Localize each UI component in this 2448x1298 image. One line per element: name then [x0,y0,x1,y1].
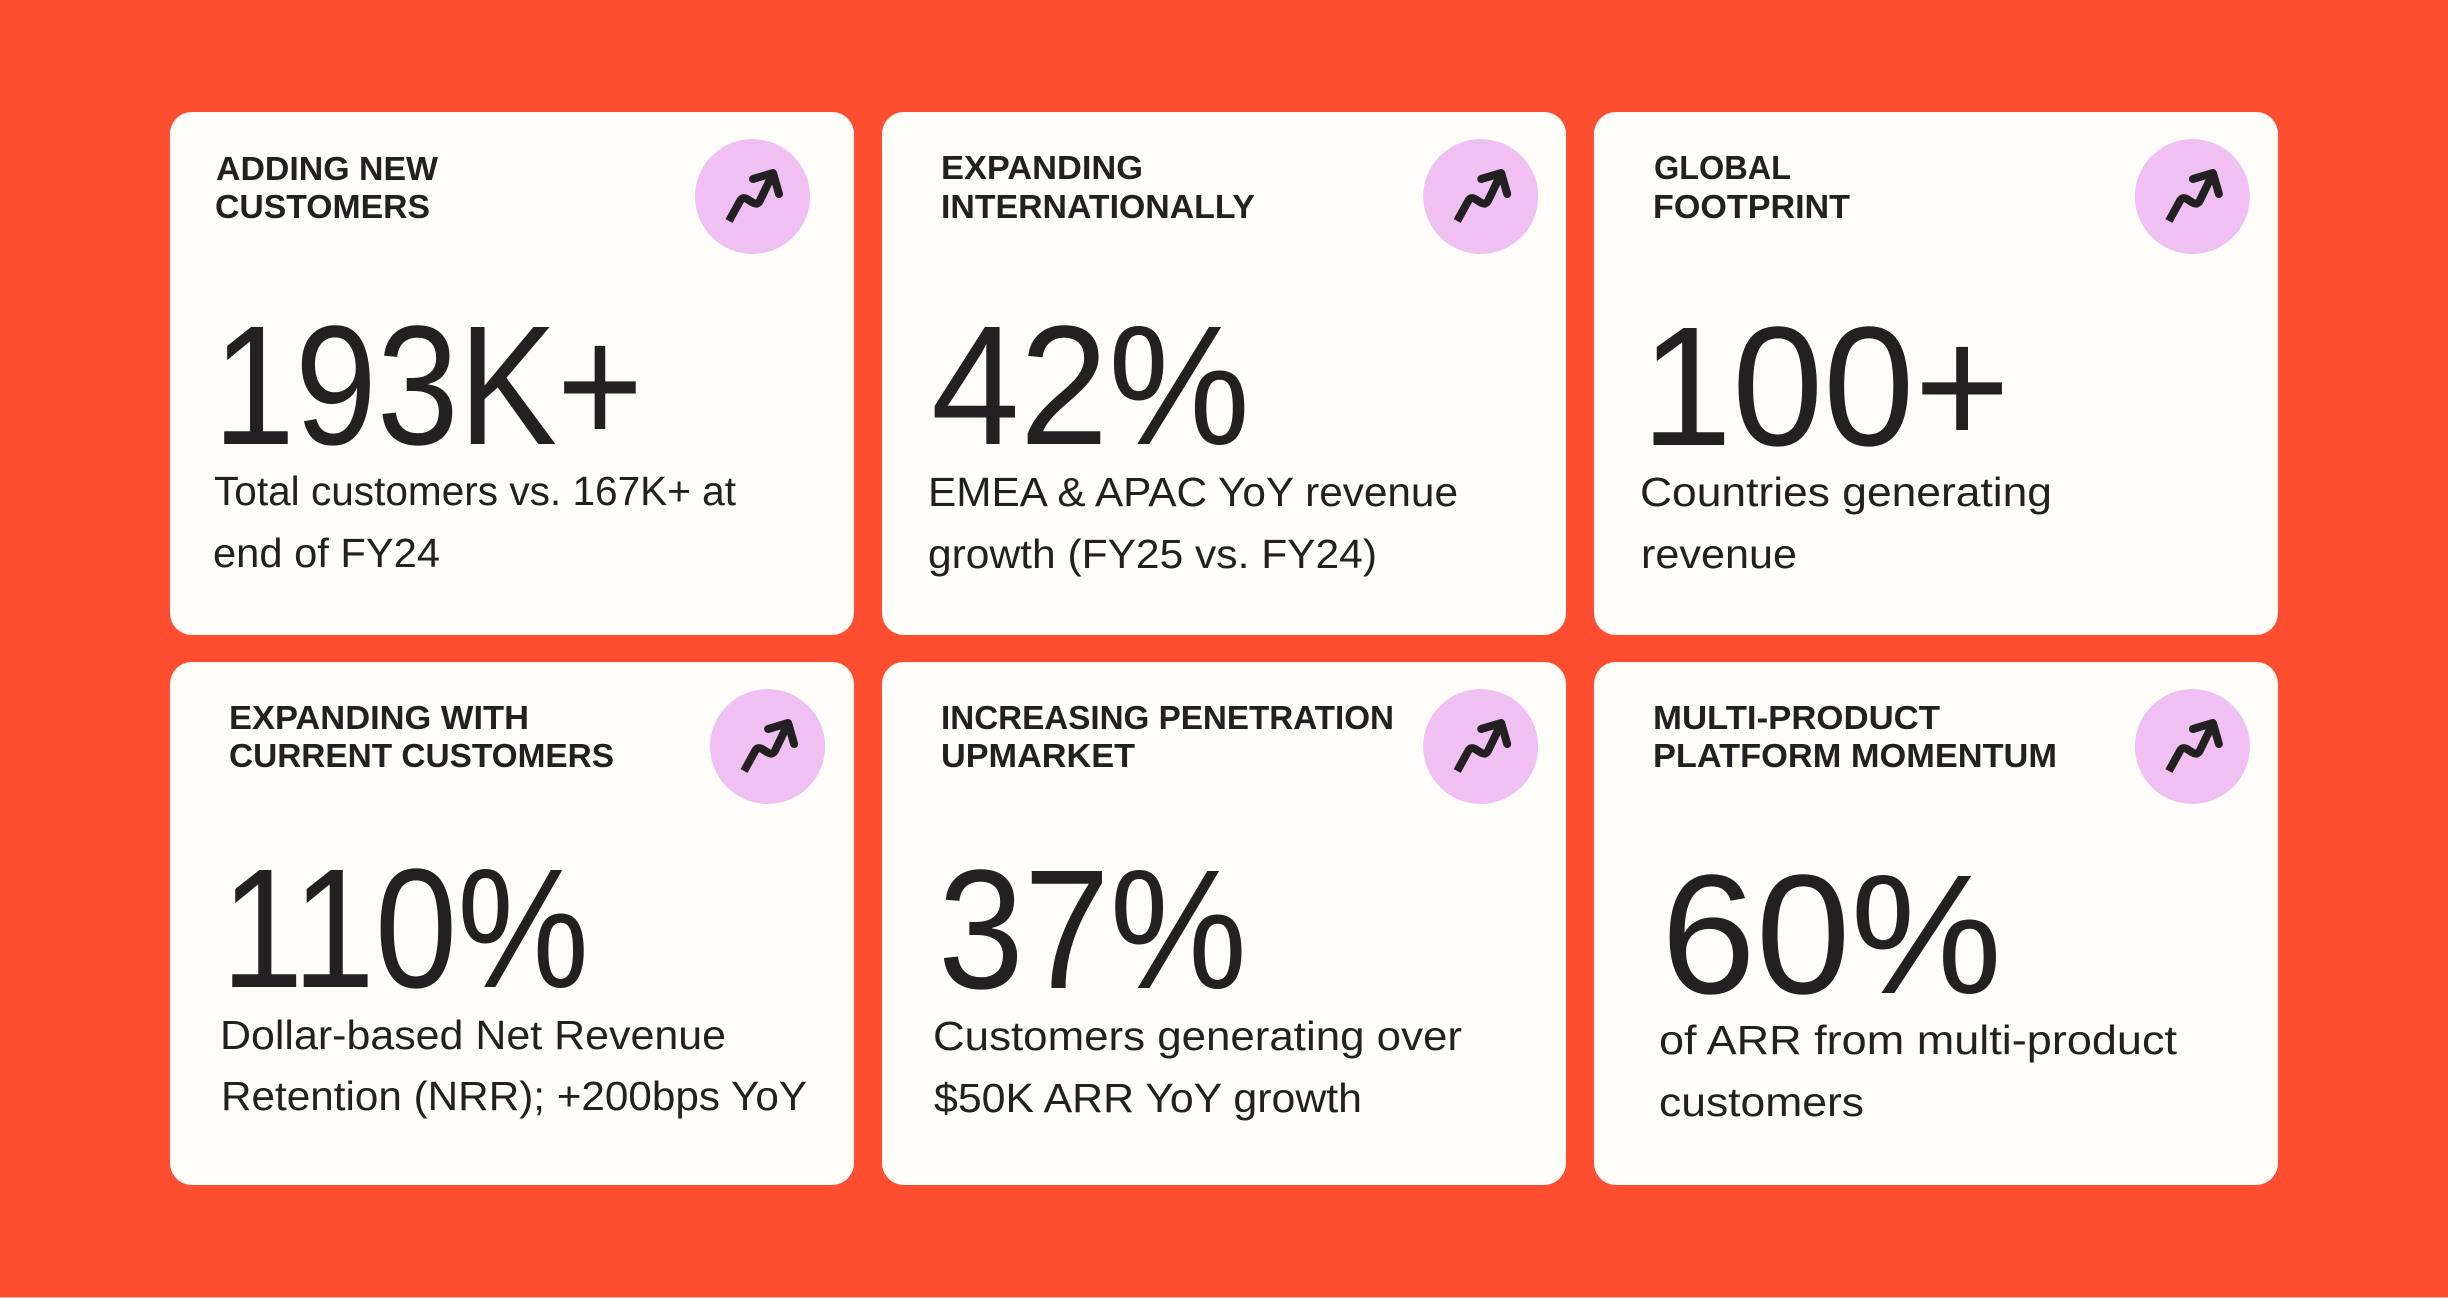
big number: 100+: 100+ [1641,292,2010,482]
icon: trend arrow [1423,139,1538,254]
icon: trend arrow [695,139,810,254]
heading: expanding internationally [941,149,1255,225]
heading: expanding with current customers: EXPANDING WITH [229,699,529,736]
heading: adding new customers [215,150,439,225]
big number: 37%: 37% [938,835,1247,1025]
heading: adding new customers: ADDING NEW [216,150,439,187]
heading: multi-product platform momentum [1653,699,2057,774]
icon: trend arrow [710,689,825,804]
heading: expanding internationally: EXPANDING [941,149,1143,186]
big number: 60%: 60% [1661,840,2002,1030]
heading: expanding internationally: INTERNATIONALLY [941,188,1255,225]
description: EMEA and APAC growth [928,469,1458,577]
heading: global footprint: FOOTPRINT [1653,188,1850,225]
description: countries generating revenue: revenue [1641,531,1797,577]
description: EMEA and APAC growth: growth (FY25 vs. FY24) [928,531,1377,577]
description: net revenue retention [220,1012,807,1119]
big number: 193K+: 193K+ [213,291,643,481]
panel: expanding with current customers [170,662,854,1185]
big number: 110%: 110% [221,834,589,1024]
description: EMEA and APAC growth: EMEA & APAC YoY revenue [928,469,1458,515]
description: net revenue retention: Dollar-based Net Revenue [220,1012,726,1058]
description: ARR from multi-product customers: of ARR from multi-product [1659,1017,2178,1063]
description: net revenue retention: Retention (NRR); +200bps YoY [221,1073,807,1119]
panel: expanding internationally [882,112,1566,635]
heading: increasing penetration upmarket [941,699,1394,774]
panel: adding new customers [170,112,854,635]
heading: global footprint: GLOBAL [1654,149,1791,186]
heading: multi-product platform momentum: MULTI-PRODUCT [1653,699,1940,736]
panel: multi-product platform momentum [1594,662,2278,1185]
description: ARR from multi-product customers: customers [1659,1079,1864,1125]
icon: trend arrow [2135,689,2250,804]
description: countries generating revenue [1640,469,2052,577]
heading: increasing penetration upmarket: UPMARKET [941,737,1135,774]
description: total customers [213,468,737,576]
description: countries generating revenue: Countries generating [1640,469,2052,515]
icon: trend arrow [2135,139,2250,254]
heading: increasing penetration upmarket: INCREASING PENETRATION [941,699,1394,736]
big number: 42%: 42% [931,291,1250,481]
heading: adding new customers: CUSTOMERS [215,188,430,225]
heading: multi-product platform momentum: PLATFORM MOMENTUM [1653,737,2057,774]
heading: global footprint [1653,149,1850,225]
heading: expanding with current customers: CURRENT CUSTOMERS [229,737,614,774]
heading: expanding with current customers [229,699,614,774]
panel: increasing penetration upmarket [882,662,1566,1185]
description: total customers: Total customers vs. 167K+ at [214,468,737,514]
icon: trend arrow [1423,689,1538,804]
description: total customers: end of FY24 [213,530,440,576]
description: customers over $50K ARR: $50K ARR YoY growth [934,1075,1362,1121]
description: customers over $50K ARR: Customers generating over [933,1013,1462,1059]
description: ARR from multi-product customers [1659,1017,2178,1125]
panel: global footprint [1594,112,2278,635]
description: customers over $50K ARR [933,1013,1462,1121]
